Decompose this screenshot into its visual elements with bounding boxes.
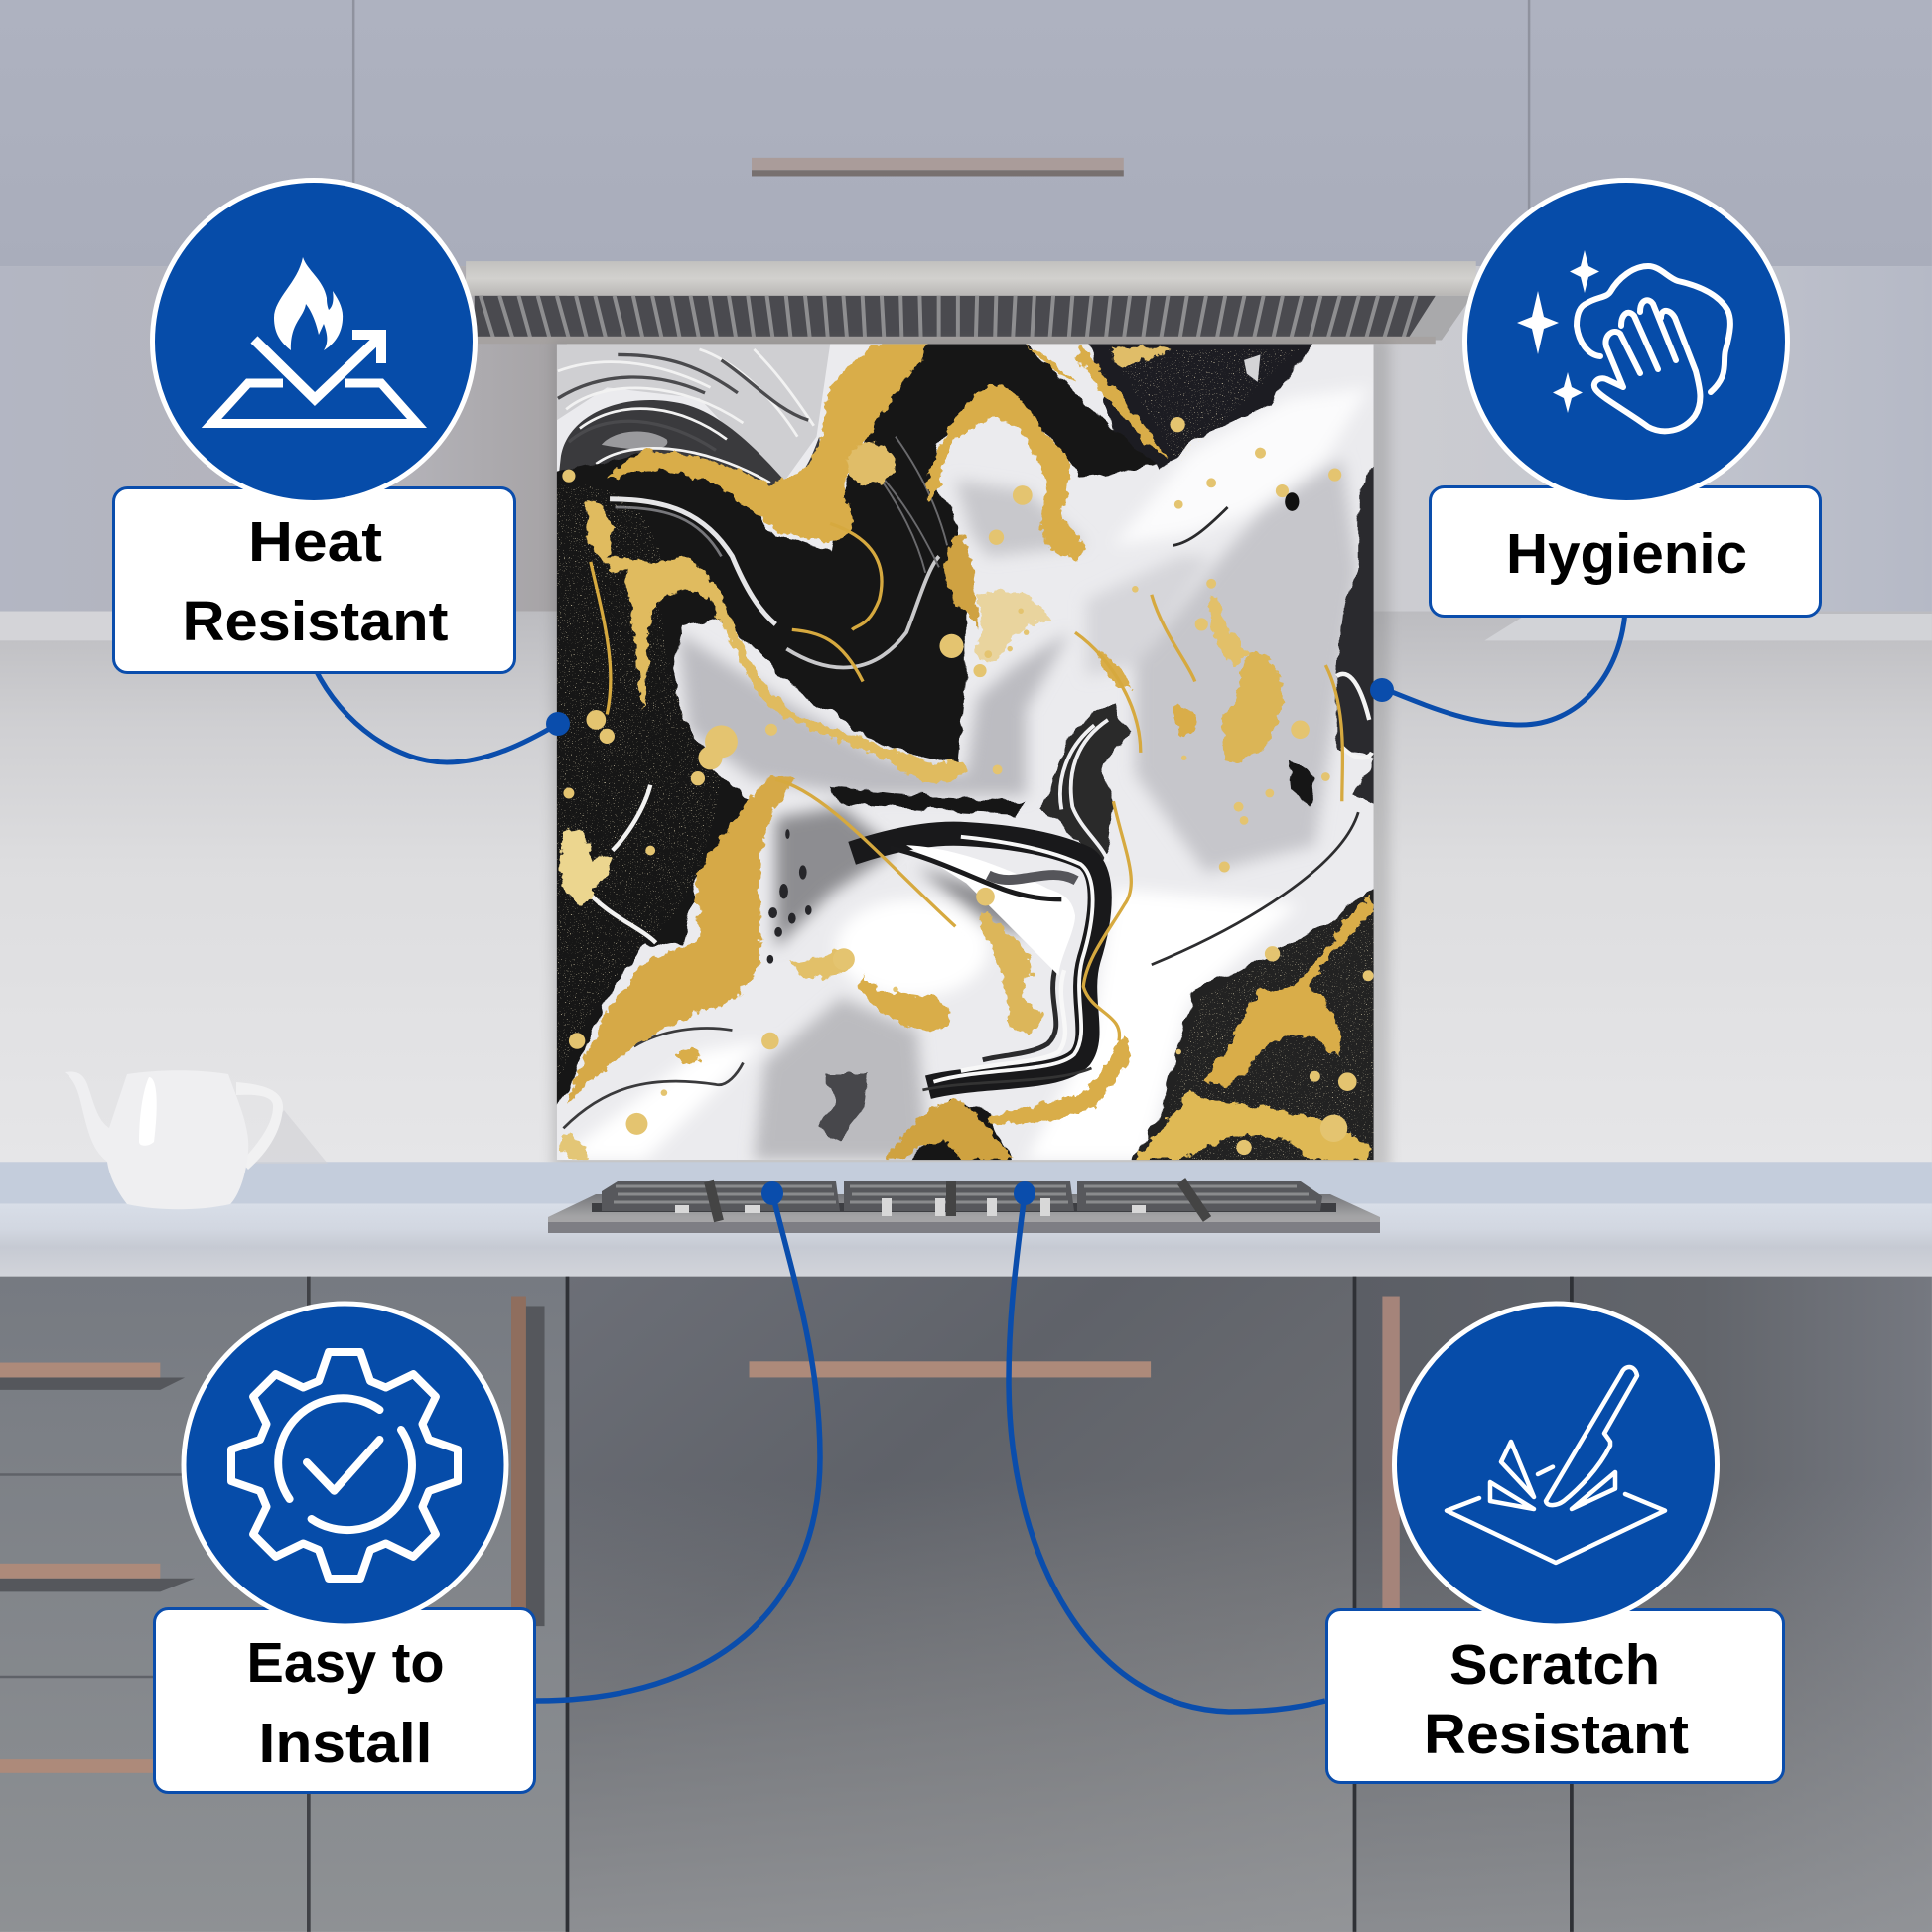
callout: heat resistant	[113, 181, 514, 673]
badge: scratch resistant	[1394, 1304, 1718, 1626]
icon: gear with check mark	[231, 1352, 458, 1579]
connector: hygienic	[1370, 612, 1625, 725]
label box: easy to install	[155, 1608, 534, 1793]
heading: easy to install: Easy to	[246, 1631, 445, 1695]
heading: heat resistant: Resistant	[183, 590, 449, 653]
heading: hygienic: Hygienic	[1506, 522, 1747, 586]
countertop	[0, 1162, 1932, 1277]
heading: easy to install: Install	[258, 1712, 433, 1775]
panel: marble glass splashback	[547, 339, 1380, 1167]
heading: scratch resistant	[1424, 1633, 1689, 1766]
label box: hygienic	[1430, 486, 1821, 616]
badge: hygienic	[1465, 181, 1787, 502]
label box: heat resistant	[113, 488, 514, 673]
heading: easy to install	[246, 1631, 445, 1775]
marble gold veins	[560, 339, 1372, 1161]
marble dark speckles	[767, 829, 812, 964]
gas hob	[548, 1181, 1380, 1233]
callout: easy to install	[155, 1304, 534, 1793]
icon: knife scratching a surface	[1447, 1367, 1665, 1563]
badge: heat resistant	[153, 181, 475, 502]
shelf undersides	[0, 612, 1932, 640]
heading: scratch resistant: Scratch	[1449, 1633, 1660, 1697]
marble soft grey shading	[557, 387, 1369, 1160]
marble black regions	[547, 339, 1380, 1167]
wall	[0, 612, 1932, 1168]
icon: flame over reflecting surface	[211, 257, 417, 423]
badge: easy to install	[184, 1304, 506, 1626]
upper cabinets	[0, 0, 1932, 612]
heading: scratch resistant: Resistant	[1424, 1703, 1689, 1766]
teapot	[65, 1070, 328, 1209]
connector: scratch resistant	[1009, 1181, 1325, 1712]
heading: heat resistant: Heat	[248, 510, 382, 574]
extractor hood	[466, 261, 1476, 344]
connector: easy to install	[536, 1181, 820, 1701]
icon: hand wiping with sparkles	[1517, 250, 1730, 431]
panel shadow	[552, 339, 1390, 1171]
callout: hygienic	[1430, 181, 1821, 616]
cabinet handles	[0, 1297, 1400, 1773]
marble black and white stripes	[563, 437, 1372, 1128]
connector: heat resistant	[315, 668, 570, 762]
callout: scratch resistant	[1326, 1304, 1783, 1783]
heading: heat resistant	[183, 510, 449, 653]
lower cabinets	[0, 1277, 1932, 1932]
label box: scratch resistant	[1326, 1610, 1783, 1783]
marble gold thin lines and splatters	[562, 354, 1374, 1155]
marble gold dust	[557, 344, 1374, 1160]
marble top-left swirl	[557, 344, 830, 491]
